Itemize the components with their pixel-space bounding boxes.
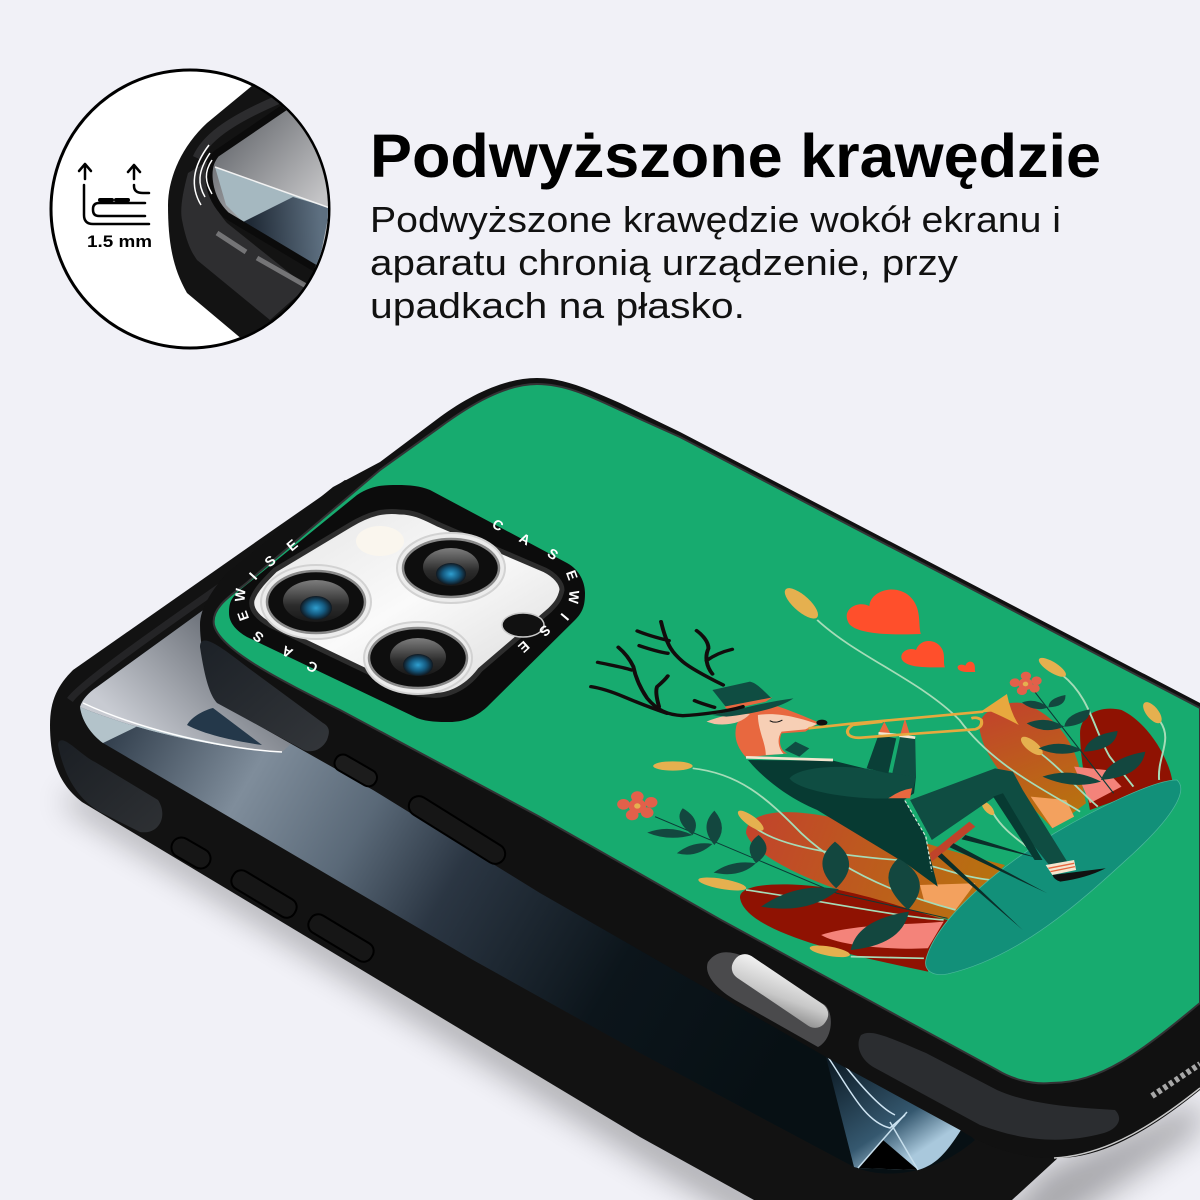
- hat: [712, 698, 793, 717]
- ring lettering: S: [545, 545, 561, 563]
- ring lettering: [231, 516, 583, 676]
- ring body: [229, 485, 585, 722]
- ring lettering: I: [558, 610, 572, 624]
- ring lettering: S: [261, 552, 279, 570]
- inset circle: raised edge close-up: [51, 70, 340, 348]
- body text: [370, 199, 1061, 326]
- back phone: [50, 480, 1060, 1200]
- back phone screen reflections: [826, 1057, 961, 1170]
- trumpet: [808, 694, 1019, 738]
- ring lettering: S: [250, 628, 266, 646]
- label: 1.5 mm: 1.5 mm: [87, 232, 152, 251]
- ring lettering: A: [279, 643, 295, 661]
- flash: [356, 526, 404, 556]
- lens: top right: [397, 533, 505, 603]
- lens: left: [261, 565, 371, 639]
- back phone carbon patch: [58, 740, 162, 832]
- ring lettering: C: [490, 516, 506, 534]
- camera ring: [229, 485, 585, 722]
- deer figure: [706, 682, 1106, 887]
- illustration: deer playing trumpet: [591, 584, 1181, 975]
- body text: aparatu chronią urządzenie, przy: [370, 242, 958, 283]
- teal ground: [926, 780, 1181, 975]
- camera opening: [252, 511, 562, 695]
- charging port: [707, 949, 833, 1047]
- ring lettering: C: [304, 658, 320, 676]
- ring lettering: W: [565, 590, 583, 605]
- top phone carbon patches: [200, 641, 329, 751]
- head: [735, 705, 819, 757]
- shadows under phones: [60, 790, 1200, 1200]
- autumn leaves: [740, 703, 1172, 972]
- back phone screen: [80, 540, 975, 1174]
- back phone pale glass reflection: [80, 540, 340, 752]
- leafy sprigs: [647, 692, 1145, 950]
- lens: bottom: [364, 622, 472, 694]
- back phone buttons: [168, 834, 377, 965]
- ring lettering: W: [231, 587, 249, 602]
- body text: upadkach na płasko.: [370, 285, 745, 326]
- jacket: [748, 760, 938, 887]
- ring lettering: E: [563, 568, 581, 582]
- trousers: [910, 768, 1068, 867]
- ring lettering: I: [246, 569, 260, 583]
- body text: Podwyższone krawędzie wokół ekranu i: [370, 199, 1061, 240]
- ring lettering: E: [234, 609, 252, 623]
- grass stems: [693, 620, 1165, 958]
- top phone mute switch: [332, 752, 380, 789]
- top phone volume button: [405, 792, 509, 868]
- golden grass heads: [653, 584, 1165, 959]
- chair: [930, 822, 1047, 930]
- back phone body: [50, 480, 1060, 1200]
- underside highlight and speaker: [1054, 1088, 1200, 1158]
- hearts: [847, 590, 975, 672]
- top phone: [200, 378, 1200, 1158]
- ring lettering: S: [536, 622, 554, 640]
- antlers: [591, 622, 743, 716]
- top phone body: [200, 378, 1200, 1158]
- microphone hole: [502, 613, 544, 637]
- flowers: [617, 672, 1042, 820]
- ring lettering: E: [283, 536, 301, 554]
- title: Podwyższone krawędzie: [370, 122, 1101, 190]
- green back panel: [214, 384, 1200, 1083]
- ring lettering: A: [517, 530, 533, 548]
- icon: 1.5 mm raised lip diagram: [79, 164, 149, 224]
- ring lettering: E: [515, 638, 533, 656]
